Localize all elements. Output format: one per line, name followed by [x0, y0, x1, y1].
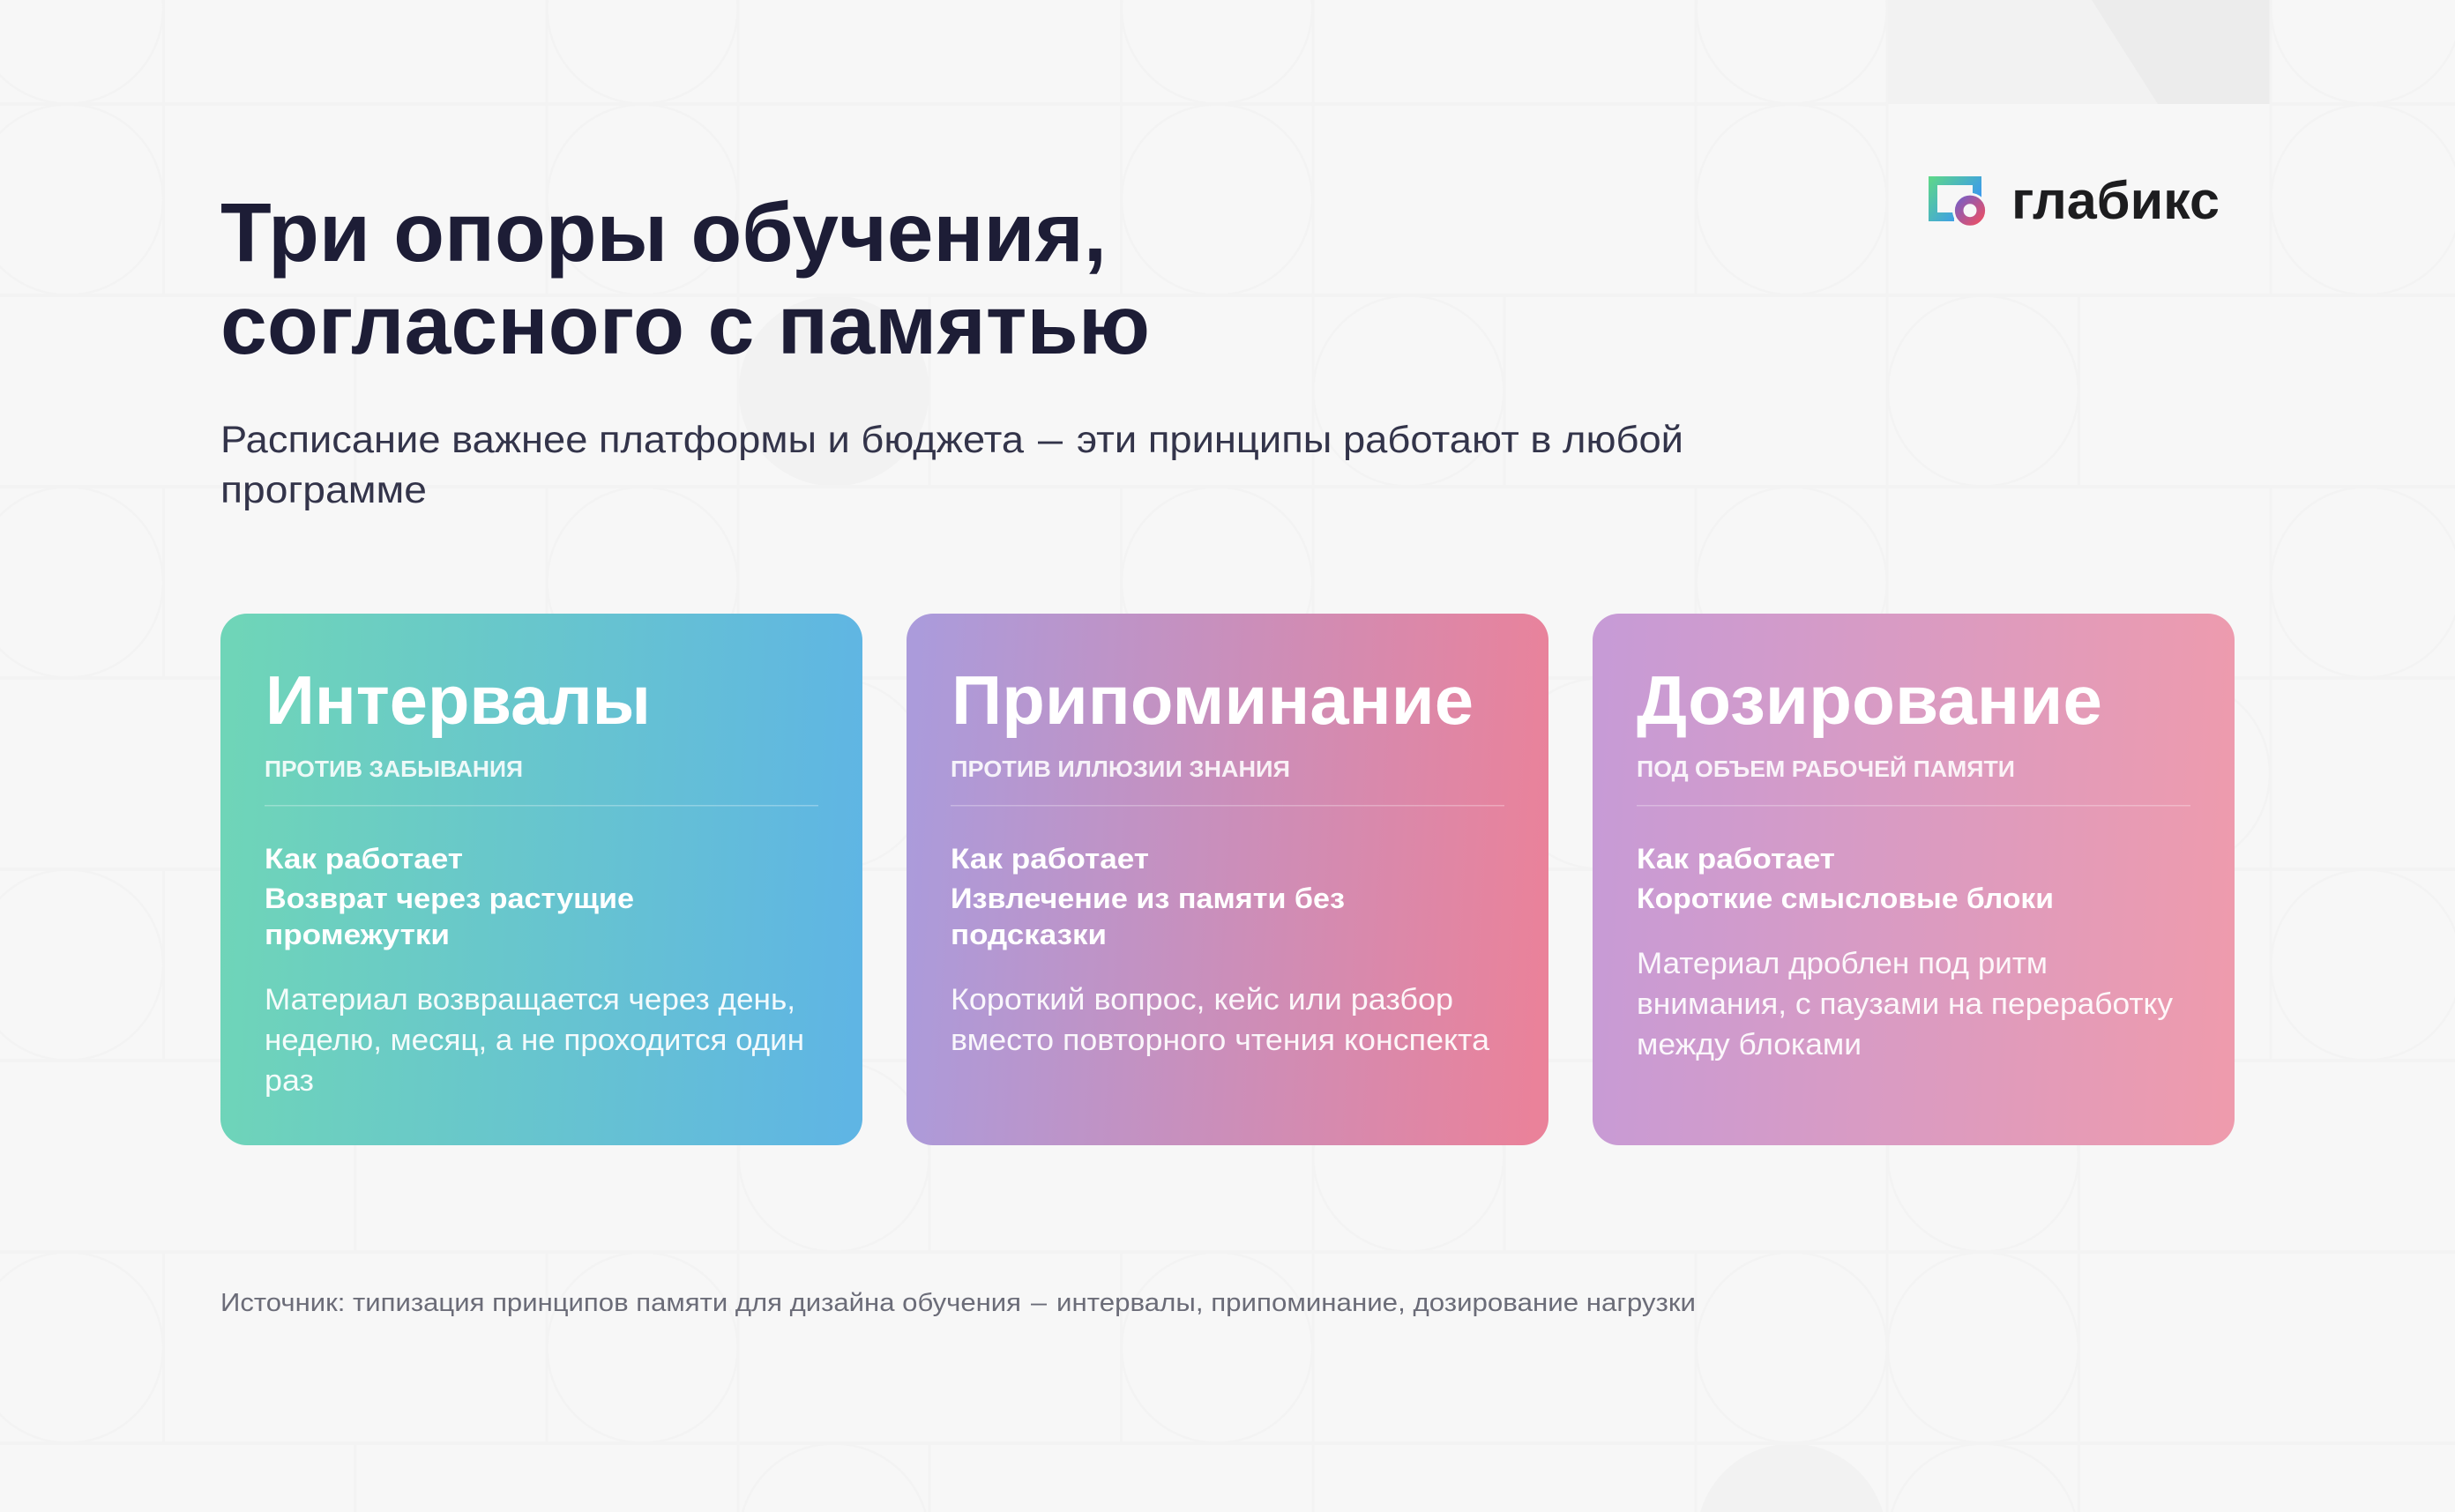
title: согласного с памятью — [220, 279, 1150, 372]
card subheading: ПРОТИВ ЗАБЫВАНИЯ — [265, 756, 523, 782]
title — [220, 186, 1150, 372]
description: раз — [265, 1064, 314, 1098]
description: Короткий вопрос, кейс или разбор — [951, 983, 1453, 1017]
how it works: подсказки — [951, 919, 1107, 950]
description: вместо повторного чтения конспекта — [951, 1024, 1489, 1057]
description: неделю, месяц, а не проходится один — [265, 1024, 804, 1057]
source note: — — [1031, 1289, 1047, 1317]
logo wordmark: глабикс — [2011, 171, 2220, 230]
source note — [220, 1289, 1696, 1317]
how it works: Возврат через растущие — [265, 883, 634, 914]
subtitle: эти принципы работают в любой — [1077, 419, 1683, 461]
how it works: Как работает — [265, 843, 463, 875]
how it works: Как работает — [1637, 843, 1835, 875]
panel: Интервалы — [220, 614, 862, 1145]
title: Три опоры обучения, — [220, 186, 1107, 279]
description: Материал дроблен под ритм — [1637, 947, 2048, 980]
how it works — [265, 843, 634, 950]
description — [1637, 947, 2173, 1061]
how it works: Извлечение из памяти без — [951, 883, 1345, 914]
subtitle — [220, 419, 1683, 511]
subtitle: — — [1038, 419, 1063, 461]
subtitle: Расписание важнее платформы и бюджета — [220, 419, 1024, 461]
subtitle: программе — [220, 469, 427, 511]
description: внимания, с паузами на переработку — [1637, 987, 2173, 1021]
description — [951, 983, 1489, 1057]
card subheading: ПОД ОБЪЕМ РАБОЧЕЙ ПАМЯТИ — [1637, 756, 2015, 782]
panel: Припоминание — [907, 614, 1548, 1145]
panel: Дозирование — [1593, 614, 2235, 1145]
description — [265, 983, 804, 1098]
logo: глабикс — [1929, 171, 2220, 230]
description: Материал возвращается через день, — [265, 983, 795, 1017]
how it works — [1637, 843, 2054, 914]
source note: Источник: типизация принципов памяти для дизайна обучения — [220, 1289, 1021, 1317]
how it works: Короткие смысловые блоки — [1637, 883, 2054, 914]
card heading: Интервалы — [265, 661, 651, 739]
how it works: промежутки — [265, 919, 450, 950]
card subheading: ПРОТИВ ИЛЛЮЗИИ ЗНАНИЯ — [951, 756, 1290, 782]
card heading: Дозирование — [1637, 661, 2102, 739]
how it works — [951, 843, 1345, 950]
description: между блоками — [1637, 1028, 1862, 1061]
how it works: Как работает — [951, 843, 1149, 875]
card heading: Припоминание — [951, 661, 1474, 739]
source note: интервалы, припоминание, дозирование нагрузки — [1056, 1289, 1696, 1317]
icon: logo mark — [1929, 176, 1988, 228]
